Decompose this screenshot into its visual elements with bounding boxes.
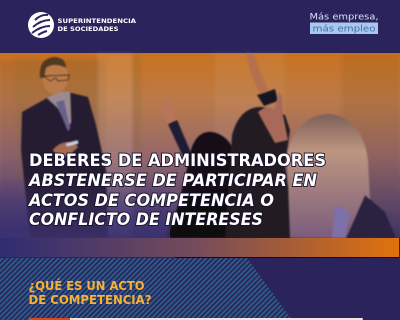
- logo wordmark: SUPERINTENDENCIA: [58, 19, 137, 25]
- subtitle lines: CONFLICTO DE INTERESES: [29, 210, 263, 229]
- title block: [27, 151, 326, 229]
- blonde person: [287, 114, 396, 238]
- logo wordmark: DE SOCIEDADES: [58, 27, 118, 33]
- slogan: Más empresa,: [310, 12, 378, 22]
- section heading: ¿QUÉ ES UN ACTO: [28, 278, 144, 293]
- subtitle lines: [27, 171, 317, 229]
- slogan: [310, 12, 378, 34]
- subtitle lines: ABSTENERSE DE PARTICIPAR EN: [27, 171, 317, 190]
- gradient band: [0, 238, 399, 257]
- logo wordmark: [58, 19, 137, 33]
- photo bottom fade: [0, 175, 170, 238]
- subtitle lines: ACTOS DE COMPETENCIA O: [27, 191, 274, 210]
- presenter: [21, 57, 108, 238]
- striped background panel: [0, 258, 292, 320]
- raised arm top: [246, 53, 278, 106]
- hand over head: [258, 92, 288, 143]
- raised hand left: [159, 95, 200, 172]
- band shadow line: [175, 257, 399, 258]
- wall panels: [0, 53, 400, 238]
- section heading: [28, 278, 152, 307]
- card top edge: [29, 318, 363, 320]
- seated person left: [170, 132, 240, 238]
- slogan: más empleo: [312, 24, 376, 34]
- seated person dark hair: [225, 107, 295, 238]
- icon: Superintendencia logo: [28, 12, 54, 38]
- hero photo: presenter and raised hands: [0, 53, 400, 238]
- central dark audience: [165, 185, 300, 238]
- title line 1: DEBERES DE ADMINISTRADORES: [29, 151, 326, 170]
- section heading: DE COMPETENCIA?: [28, 293, 152, 307]
- header band: [0, 0, 400, 53]
